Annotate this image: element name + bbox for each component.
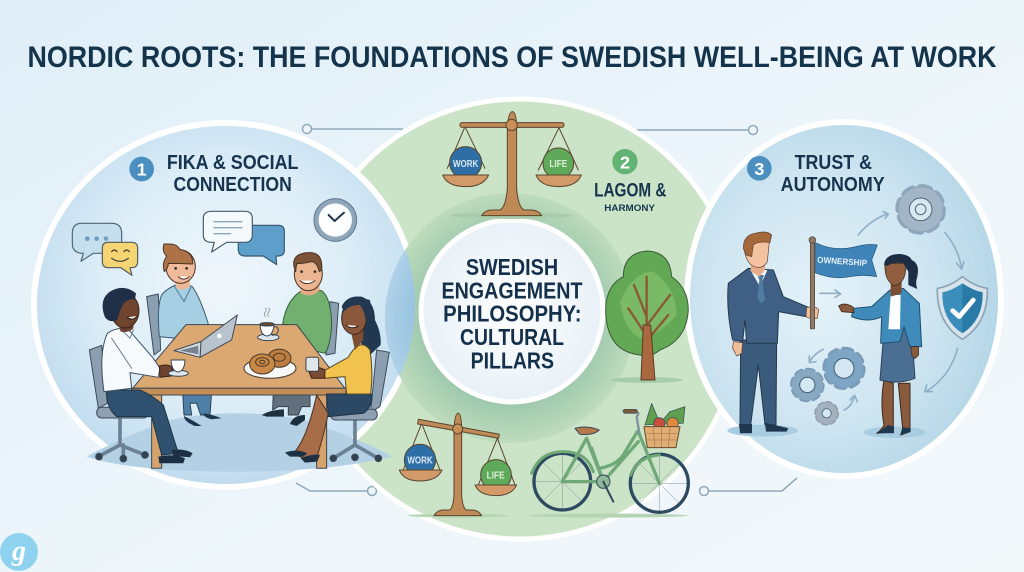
- plate of cinnamon buns: [244, 349, 296, 378]
- heading: lagom: [594, 181, 666, 213]
- icon: tree: [606, 251, 688, 383]
- person: woman in blazer: [839, 254, 922, 435]
- panel 2 artwork: [399, 112, 688, 518]
- icon: clock: [314, 199, 357, 241]
- icon: tilted balance scale: [399, 413, 517, 518]
- section number 1: 1: [137, 160, 147, 180]
- icon: blue speech bubble: [238, 225, 284, 265]
- icon: tilted balance scale: WORK: [407, 456, 433, 467]
- chair: green man: [326, 302, 339, 355]
- floor shadow: [87, 413, 392, 472]
- icon: ownership flag: OWNERSHIP: [817, 255, 868, 268]
- heading: trust: TRUST &: [795, 152, 872, 174]
- process arrows: [809, 212, 964, 410]
- floor shadows: [727, 425, 926, 438]
- heading: lagom: HARMONY: [604, 203, 656, 213]
- icon: top gear: [900, 189, 941, 230]
- chair: yellow sweater woman: [330, 350, 389, 462]
- person: white shirt man: [102, 288, 193, 463]
- section number 2: [612, 149, 638, 174]
- section number 3: [747, 156, 772, 181]
- table: [131, 325, 346, 468]
- section number 2: 2: [620, 152, 630, 172]
- icon: tilted balance scale: LIFE: [487, 470, 505, 481]
- heading: lagom: LAGOM &: [594, 181, 666, 202]
- person: green sweater man: [262, 253, 332, 426]
- heading: fika: FIKA & SOCIAL: [167, 152, 298, 174]
- laptop: [174, 315, 237, 357]
- heading: trust: [781, 152, 885, 196]
- coffee cup on table: [258, 308, 279, 341]
- logo badge: g: [11, 536, 26, 567]
- icon: ownership flag: [809, 237, 877, 329]
- icon: lower gears: [793, 350, 862, 423]
- central heading: ENGAGEMENT: [441, 277, 583, 303]
- panel: trust circle: [687, 122, 1001, 476]
- person: man in suit: [728, 232, 819, 433]
- panel 1 artwork: [72, 152, 392, 472]
- section number 1: [129, 157, 154, 181]
- icon: smiley bubble: [102, 242, 138, 275]
- central heading: [441, 254, 583, 373]
- heading: trust: AUTONOMY: [781, 174, 885, 196]
- central heading: PHILOSOPHY:: [443, 301, 581, 327]
- central heading: PILLARS: [471, 347, 554, 373]
- central circle: [421, 220, 603, 402]
- heading: fika: [167, 152, 298, 196]
- central halo: [385, 193, 635, 443]
- panel: lagom green circle: [300, 99, 740, 539]
- person: yellow sweater woman: [285, 296, 381, 463]
- chair: white shirt man: [89, 345, 148, 462]
- connector lines: [296, 124, 797, 496]
- panel: fika circle: [34, 123, 416, 487]
- section number 3: 3: [754, 159, 764, 179]
- icon: top balance scale: WORK: [453, 159, 479, 170]
- person: blue sweater woman: [158, 244, 222, 426]
- panel 3 artwork: [727, 152, 987, 438]
- central heading: SWEDISH: [466, 254, 558, 280]
- icon: shield: [937, 277, 987, 339]
- logo badge: [0, 533, 38, 571]
- white cup: [168, 360, 188, 376]
- icon: top balance scale: [443, 112, 581, 219]
- heading: fika: CONNECTION: [173, 174, 292, 196]
- chair: blue woman: [147, 294, 161, 355]
- central heading: CULTURAL: [460, 324, 564, 350]
- icon: chat bubble dots: [72, 223, 122, 261]
- icon: top balance scale: LIFE: [549, 159, 568, 170]
- icon: white speech bubble: [203, 211, 252, 252]
- icon: bicycle: [528, 403, 688, 518]
